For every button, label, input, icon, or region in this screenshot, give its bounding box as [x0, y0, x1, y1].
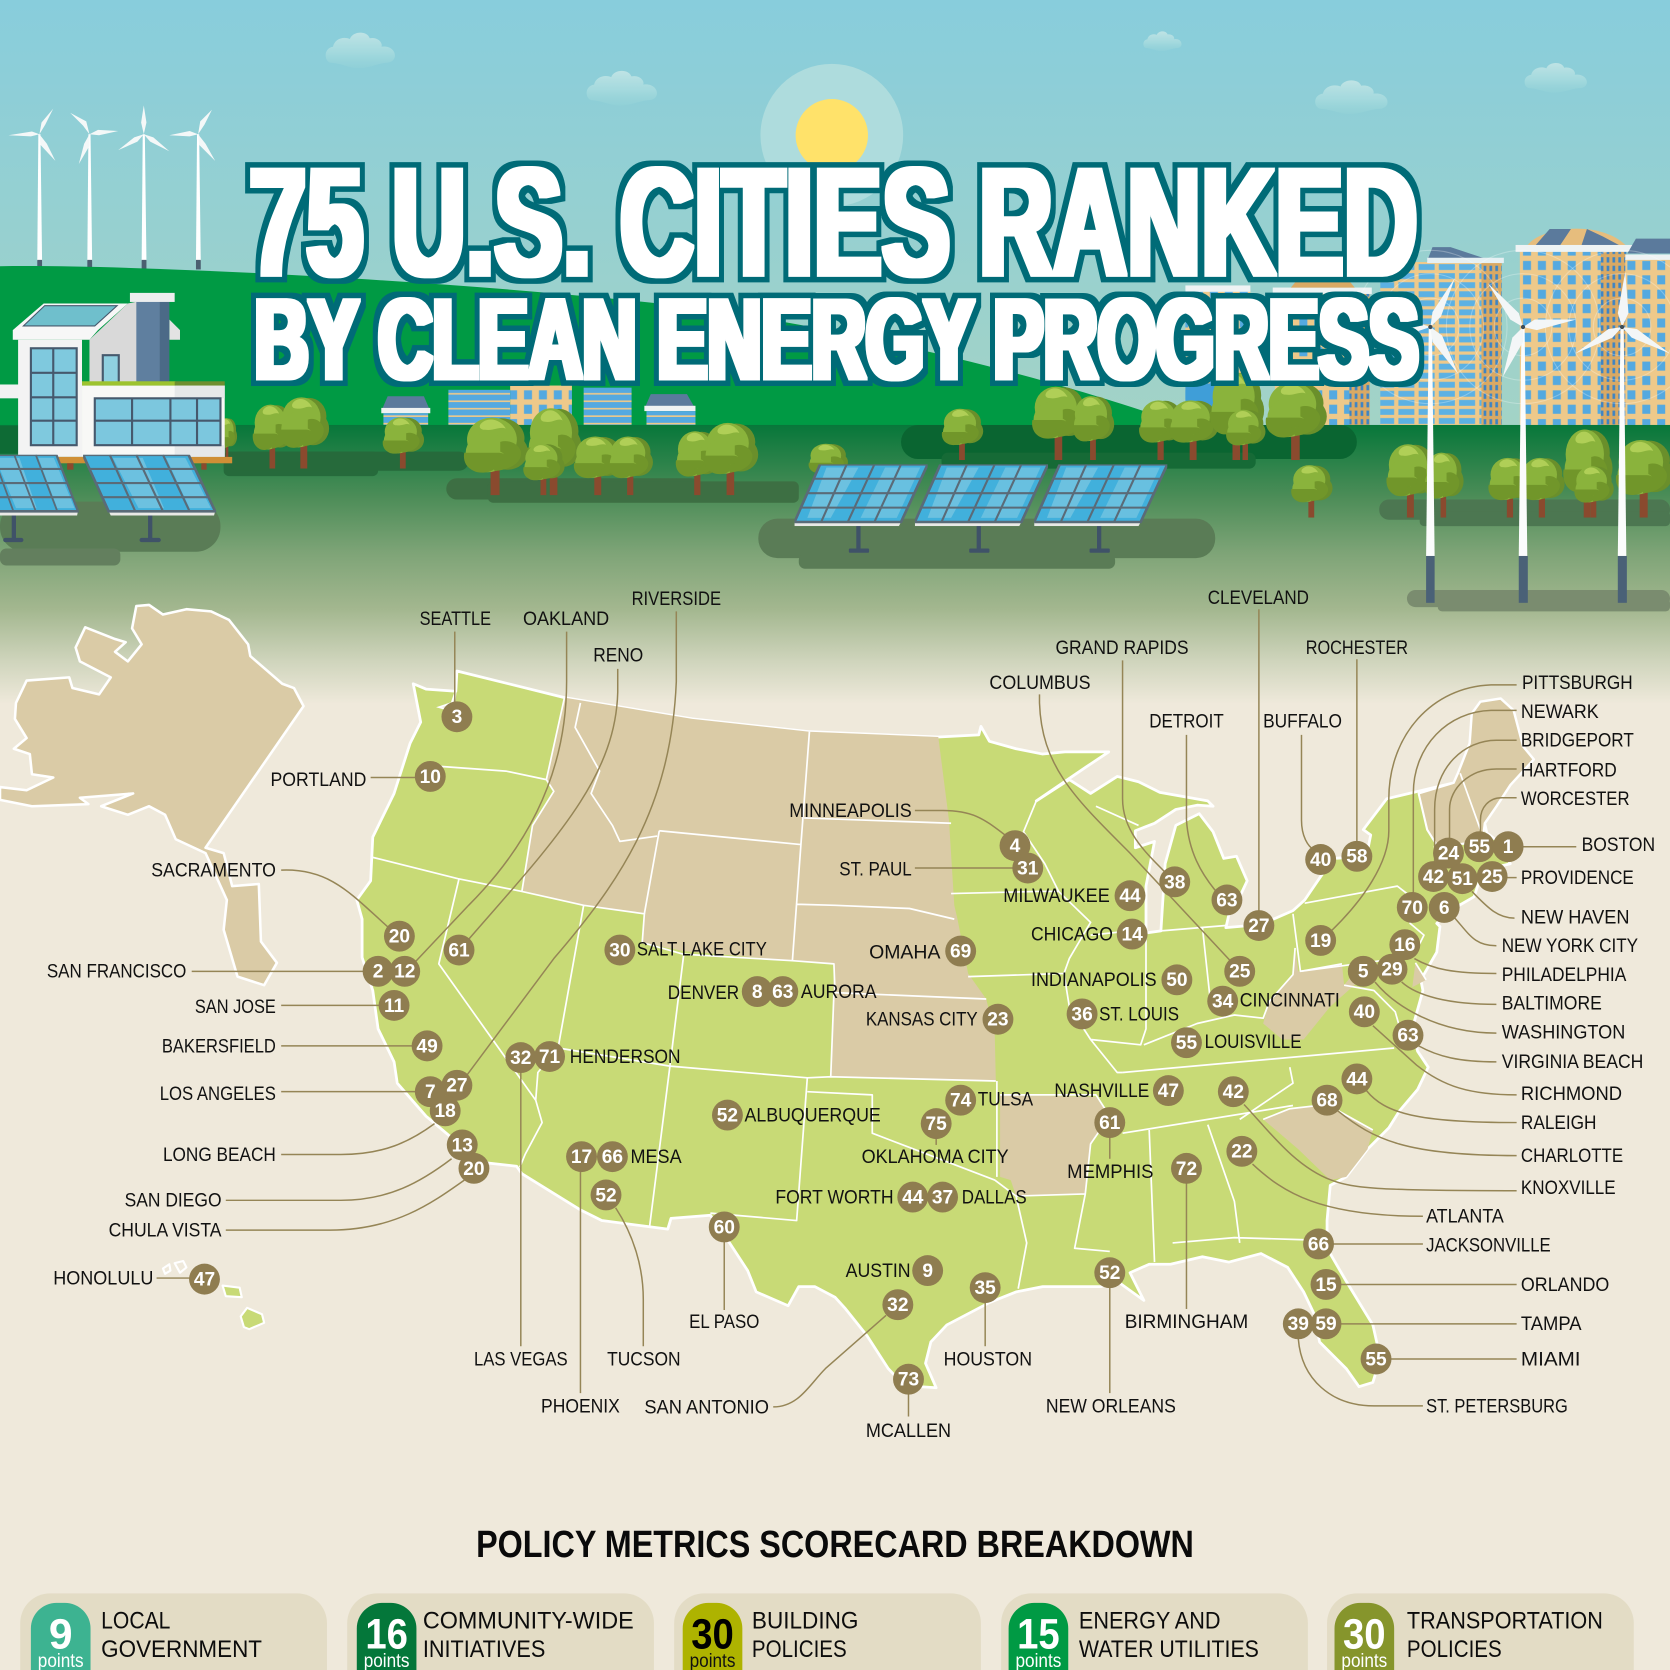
city: San Antonio: SAN ANTONIO [644, 1397, 769, 1418]
city: Reno: 61 [448, 940, 470, 961]
city: Chula Vista [109, 1153, 489, 1242]
city: Knoxville: 42 [1223, 1082, 1244, 1103]
city: Honolulu: HONOLULU [53, 1268, 153, 1289]
city: Omaha: OMAHA [869, 943, 941, 964]
tan state: South Carolina [1263, 1104, 1373, 1180]
city: Hartford [1433, 760, 1617, 869]
card text [1079, 1607, 1259, 1663]
city: Milwaukee: 44 [1119, 886, 1141, 907]
city: Phoenix: 17 [571, 1147, 592, 1168]
card text: GOVERNMENT [101, 1636, 262, 1663]
city: New Orleans: 52 [1099, 1263, 1120, 1284]
map: contiguous states [357, 671, 1534, 1388]
city: San Francisco: 2 [373, 962, 383, 983]
city: Cleveland [1208, 588, 1309, 941]
title [249, 135, 1419, 404]
city: Seattle: SEATTLE [420, 609, 491, 630]
ground shadows [0, 425, 1670, 611]
city: Richmond: 40 [1354, 1002, 1375, 1023]
city: Boston: BOSTON [1582, 835, 1655, 856]
city: Tucson: 52 [595, 1185, 617, 1206]
city: Grand Rapids: 38 [1164, 872, 1186, 893]
card: building policies [674, 1593, 981, 1670]
city: Philadelphia: PHILADELPHIA [1502, 965, 1627, 986]
city: Milwaukee [1003, 880, 1145, 911]
city: Jacksonville: 66 [1308, 1234, 1329, 1255]
badge: 30 points: 30 [691, 1611, 734, 1659]
city: Omaha: 69 [950, 941, 971, 962]
badge: 30 points: 30 [1343, 1611, 1386, 1659]
city: Tulsa [945, 1085, 1033, 1116]
city: Reno [444, 645, 643, 965]
city: Pittsburgh: PITTSBURGH [1522, 673, 1633, 694]
city: Long Beach [163, 1095, 461, 1166]
city: Bakersfield [162, 1030, 443, 1061]
badge: 9 points: 9 [49, 1611, 73, 1659]
city: Memphis: MEMPHIS [1067, 1162, 1153, 1183]
city: Cleveland: CLEVELAND [1208, 588, 1309, 609]
city: Kansas City: KANSAS CITY [866, 1010, 978, 1031]
city: Austin: 9 [922, 1261, 933, 1282]
city: Buffalo: BUFFALO [1263, 711, 1342, 732]
city: St. Paul: ST. PAUL [839, 859, 912, 880]
city: Miami: 55 [1365, 1349, 1387, 1370]
city: Austin: AUSTIN [846, 1261, 911, 1282]
city: Salt Lake City: SALT LAKE CITY [637, 939, 767, 960]
city: Bridgeport: BRIDGEPORT [1521, 731, 1634, 752]
city: Henderson: HENDERSON [570, 1047, 681, 1068]
city: Minneapolis [789, 801, 1030, 861]
city: Washington [1348, 956, 1625, 1043]
card text [101, 1607, 262, 1663]
city: El Paso [689, 1211, 759, 1333]
city: Pittsburgh: 19 [1310, 931, 1331, 952]
city: Bridgeport [1418, 731, 1634, 892]
city: Kansas City [866, 1004, 1013, 1035]
city: New Haven [1447, 863, 1630, 928]
city: St. Louis: ST. LOUIS [1099, 1004, 1179, 1025]
city: Providence: 25 [1481, 867, 1503, 888]
city: Tampa: TAMPA [1521, 1314, 1582, 1335]
city: Fort Worth [775, 1182, 928, 1213]
city: Aurora [767, 976, 877, 1007]
city: New Haven: NEW HAVEN [1521, 907, 1630, 928]
city: Austin [846, 1255, 943, 1286]
city: Miami [1361, 1344, 1581, 1374]
city: Louisville: 55 [1176, 1033, 1197, 1054]
city: Fort Worth: 44 [902, 1188, 924, 1209]
scorecard heading: POLICY METRICS SCORECARD BREAKDOWN [476, 1523, 1194, 1566]
city: Seattle: 3 [452, 707, 462, 728]
city: Portland: 10 [420, 767, 441, 788]
city: Tampa: 59 [1315, 1314, 1337, 1335]
city: Sacramento: SACRAMENTO [151, 861, 276, 882]
city: McAllen [866, 1364, 951, 1442]
city: Denver: DENVER [668, 983, 739, 1004]
city: Henderson: 71 [539, 1047, 561, 1068]
city: Oklahoma City: OKLAHOMA CITY [862, 1147, 1009, 1168]
city: Chicago: 14 [1121, 924, 1143, 945]
city: Mesa: MESA [631, 1147, 682, 1168]
city: New Haven: 51 [1452, 869, 1473, 890]
city: Buffalo [1263, 711, 1342, 875]
city towers [1185, 229, 1670, 425]
tan state: Delaware [1412, 963, 1426, 987]
solar panels: center [795, 464, 1167, 553]
city: Orlando [1311, 1269, 1609, 1300]
map: Hawaii [163, 1261, 264, 1329]
city: Raleigh: RALEIGH [1521, 1113, 1597, 1134]
solar panels: left [0, 455, 215, 542]
state borders [373, 698, 1487, 1289]
card text: BUILDING [752, 1607, 858, 1634]
city: Memphis [1067, 1107, 1153, 1183]
card text: POLICIES [1407, 1636, 1502, 1663]
city: Orlando: 15 [1315, 1275, 1337, 1296]
city: Tampa [1311, 1308, 1582, 1339]
city: Jacksonville: JACKSONVILLE [1426, 1235, 1551, 1256]
city: Chula Vista: CHULA VISTA [109, 1221, 222, 1242]
card text [423, 1607, 634, 1663]
city: Miami: MIAMI [1521, 1349, 1581, 1370]
card: transportation policies [1327, 1593, 1634, 1670]
city: Newark: 70 [1402, 898, 1423, 919]
city: Columbus: COLUMBUS [989, 673, 1091, 694]
city: Sacramento: 20 [389, 927, 410, 948]
city: El Paso: EL PASO [689, 1312, 759, 1333]
small wind turbines on hill [9, 105, 215, 269]
badge: 15 points [1009, 1603, 1068, 1670]
city: Oakland: 12 [394, 962, 415, 983]
map: Alaska [0, 605, 304, 985]
city: Los Angeles: LOS ANGELES [160, 1084, 276, 1105]
city: Virginia Beach [1393, 1020, 1643, 1073]
clouds [326, 31, 1587, 114]
city: San Diego [125, 1129, 478, 1212]
city: Mesa [597, 1141, 682, 1172]
card: local government [20, 1593, 327, 1670]
ground [0, 425, 1670, 704]
city: Denver [668, 976, 773, 1007]
city: Bakersfield: 49 [416, 1036, 438, 1057]
city: San Jose: 11 [384, 996, 405, 1017]
city: Honolulu: 47 [194, 1270, 215, 1291]
city: Newark [1397, 702, 1599, 923]
city: Cincinnati: 34 [1212, 992, 1234, 1013]
tan state: West Virginia [1263, 948, 1358, 1039]
city: St. Paul: 31 [1017, 858, 1039, 879]
city: Atlanta: ATLANTA [1426, 1207, 1504, 1228]
city: Bakersfield: BAKERSFIELD [162, 1036, 276, 1057]
city: St. Louis [1067, 998, 1179, 1029]
city: Tulsa: 74 [950, 1091, 972, 1112]
city: Riverside: 27 [446, 1076, 468, 1097]
city: Washington: 5 [1358, 962, 1369, 983]
city: Denver: 8 [752, 982, 763, 1003]
city: Albuquerque: 52 [717, 1105, 738, 1126]
card text: COMMUNITY-WIDE [423, 1607, 634, 1634]
city: New York City [1429, 892, 1638, 957]
city: Nashville [1054, 1075, 1184, 1106]
city: Orlando: ORLANDO [1521, 1275, 1609, 1296]
city: Columbus [989, 673, 1255, 987]
city: Houston: HOUSTON [944, 1349, 1032, 1370]
card text [1407, 1607, 1603, 1663]
card text: POLICIES [752, 1636, 847, 1663]
city: Indianapolis: 50 [1166, 970, 1188, 991]
city: Albuquerque: ALBUQUERQUE [744, 1105, 881, 1126]
card text: ENERGY AND [1079, 1607, 1221, 1634]
city: St. Petersburg: 39 [1288, 1314, 1309, 1335]
city: Henderson [534, 1041, 681, 1072]
city: San Antonio: 32 [887, 1295, 908, 1316]
city: Aurora: AURORA [801, 982, 877, 1003]
city: Washington: WASHINGTON [1502, 1022, 1625, 1043]
city: Richmond: RICHMOND [1521, 1084, 1622, 1105]
sky [0, 0, 1670, 426]
city: Detroit: DETROIT [1149, 711, 1224, 732]
city: San Francisco [47, 956, 394, 987]
city: San Francisco: SAN FRANCISCO [47, 962, 186, 983]
city: Houston: 35 [975, 1278, 996, 1299]
city: St. Louis: 36 [1071, 1004, 1093, 1025]
city: Portland: PORTLAND [271, 770, 366, 791]
city: Detroit [1149, 711, 1242, 915]
city: Virginia Beach: 63 [1397, 1026, 1419, 1047]
city: Columbus: 25 [1229, 962, 1251, 983]
tan states: northern New England [1419, 699, 1534, 847]
city: Sacramento [151, 861, 415, 952]
city: Providence: PROVIDENCE [1521, 868, 1634, 889]
city: Honolulu [53, 1264, 220, 1295]
badge: 9 points [31, 1603, 91, 1670]
city: New York City: 6 [1439, 898, 1450, 919]
card text: TRANSPORTATION [1407, 1607, 1603, 1634]
city: Richmond [1349, 996, 1622, 1105]
city: Long Beach: 18 [435, 1101, 456, 1122]
city: Rochester: ROCHESTER [1306, 638, 1408, 659]
city: Baltimore: 29 [1381, 960, 1403, 981]
background small buildings [381, 386, 695, 425]
city: Dallas: DALLAS [962, 1188, 1027, 1209]
tan state: Arkansas [1000, 1095, 1110, 1196]
city: Rochester: 58 [1346, 847, 1368, 868]
city: Rochester [1306, 638, 1408, 872]
city: Chicago: CHICAGO [1031, 924, 1113, 945]
badge: 15 points: 15 [1017, 1611, 1060, 1659]
city: Omaha [869, 936, 976, 967]
city: Newark: NEWARK [1521, 702, 1599, 723]
city: Phoenix [541, 1141, 620, 1417]
city: Charlotte: CHARLOTTE [1521, 1146, 1623, 1167]
city: Minneapolis: 4 [1010, 836, 1021, 857]
city: Tulsa: TULSA [978, 1090, 1033, 1111]
city: McAllen: MCALLEN [866, 1421, 951, 1442]
city: Buffalo: 40 [1310, 850, 1331, 871]
city: Minneapolis: MINNEAPOLIS [789, 801, 912, 822]
city: Baltimore: BALTIMORE [1502, 994, 1602, 1015]
city: Las Vegas: 32 [510, 1048, 531, 1069]
city: McAllen: 73 [898, 1370, 919, 1391]
city: Portland [271, 761, 446, 792]
card: energy and water utilities [1001, 1593, 1308, 1670]
city: Birmingham [1125, 1153, 1248, 1333]
city: Salt Lake City: 30 [609, 940, 631, 961]
city: Fort Worth: FORT WORTH [775, 1188, 894, 1209]
city: Aurora: 63 [772, 982, 793, 1003]
city: Oklahoma City: 75 [926, 1114, 947, 1135]
city: Atlanta: 22 [1231, 1142, 1253, 1163]
city: Louisville: LOUISVILLE [1205, 1032, 1301, 1053]
hill [0, 266, 1182, 426]
city: Worcester: 55 [1469, 837, 1490, 858]
badge: 16 points: 16 [365, 1611, 408, 1659]
city: Philadelphia [1389, 929, 1627, 986]
city: Indianapolis [1031, 964, 1192, 995]
city: Raleigh [1341, 1063, 1597, 1134]
city: St. Paul [839, 853, 1043, 883]
city: Mesa: 66 [602, 1147, 623, 1168]
city: Riverside [441, 589, 721, 1101]
city: Las Vegas: LAS VEGAS [474, 1349, 568, 1370]
sun [760, 64, 903, 207]
city: Louisville [1171, 1027, 1301, 1058]
city: Memphis: 61 [1099, 1113, 1121, 1134]
city: Pittsburgh [1305, 673, 1633, 956]
card text: INITIATIVES [423, 1636, 545, 1663]
city: Los Angeles: 7 [425, 1082, 436, 1103]
trees [217, 372, 1670, 518]
city: Nashville: 47 [1158, 1081, 1179, 1102]
city: New York City: NEW YORK CITY [1502, 936, 1638, 957]
badge: 16 points [357, 1603, 416, 1670]
city: Hartford: HARTFORD [1521, 760, 1617, 781]
city: Philadelphia: 16 [1394, 935, 1415, 956]
house [0, 293, 232, 470]
card text: WATER UTILITIES [1079, 1636, 1259, 1663]
city: Houston [944, 1272, 1032, 1370]
city: San Diego: SAN DIEGO [125, 1191, 222, 1212]
city: Worcester [1464, 789, 1630, 862]
city: Los Angeles [160, 1076, 446, 1107]
city: San Jose [195, 990, 410, 1021]
card text: LOCAL [101, 1607, 170, 1634]
city: Chula Vista: 20 [463, 1159, 485, 1180]
card text [752, 1607, 858, 1663]
city: El Paso: 60 [714, 1217, 735, 1238]
city: Dallas [927, 1182, 1027, 1213]
city: Hartford: 24 [1438, 843, 1459, 864]
city: Phoenix: PHOENIX [541, 1396, 620, 1417]
card: community-wide initiatives [347, 1593, 654, 1670]
badge: 30 points [1335, 1603, 1394, 1670]
city: Boston [1493, 831, 1655, 862]
city: Grand Rapids [1055, 638, 1190, 897]
city: Providence [1477, 861, 1634, 892]
city: Salt Lake City [604, 935, 767, 965]
city: San Jose: SAN JOSE [195, 997, 276, 1018]
large wind turbines [1354, 250, 1670, 603]
city: Oklahoma City [862, 1108, 1009, 1168]
city: Detroit: 63 [1216, 890, 1238, 911]
Puget Sound notch [439, 690, 456, 711]
city: San Diego: 13 [452, 1135, 473, 1156]
city: Virginia Beach: VIRGINIA BEACH [1502, 1052, 1643, 1073]
city: Raleigh: 44 [1346, 1069, 1368, 1090]
city: Jacksonville [1303, 1229, 1551, 1259]
tan states: northern plains and Rockies [522, 698, 996, 1081]
city: Nashville: NASHVILLE [1054, 1081, 1149, 1102]
city: New Orleans: NEW ORLEANS [1046, 1396, 1176, 1417]
city: Tucson [591, 1180, 681, 1370]
city: Cleveland: 27 [1248, 916, 1270, 937]
city: Cincinnati: CINCINNATI [1240, 990, 1340, 1011]
city: Boston: 1 [1503, 837, 1514, 858]
city: Grand Rapids: GRAND RAPIDS [1055, 638, 1189, 659]
city: Long Beach: LONG BEACH [163, 1145, 276, 1166]
city: Charlotte: 68 [1316, 1091, 1338, 1112]
city: New Orleans [1046, 1257, 1176, 1417]
city: Atlanta [1226, 1136, 1504, 1228]
badge: 30 points [683, 1603, 742, 1670]
city: Chicago [1031, 919, 1148, 949]
city: Reno: RENO [593, 645, 643, 666]
city: Bridgeport: 42 [1423, 867, 1444, 888]
city: Riverside: RIVERSIDE [632, 589, 721, 610]
city: St. Petersburg [1283, 1308, 1568, 1417]
city: Knoxville: KNOXVILLE [1521, 1178, 1616, 1199]
city: Worcester: WORCESTER [1521, 789, 1630, 810]
city: St. Petersburg: ST. PETERSBURG [1426, 1396, 1568, 1417]
city: Tucson: TUCSON [607, 1349, 681, 1370]
city: Charlotte [1312, 1085, 1623, 1167]
city: Kansas City: 23 [987, 1010, 1009, 1031]
city: Indianapolis: INDIANAPOLIS [1031, 970, 1157, 991]
city: Cincinnati [1207, 986, 1340, 1017]
city: San Antonio [644, 1289, 913, 1418]
city: Dallas: 37 [932, 1188, 953, 1209]
city: Baltimore [1377, 954, 1602, 1015]
city: Birmingham: 72 [1176, 1159, 1197, 1180]
city: Albuquerque [712, 1100, 881, 1131]
city: Seattle [420, 609, 491, 732]
city: Birmingham: BIRMINGHAM [1125, 1312, 1248, 1333]
city: Oakland: OAKLAND [523, 609, 609, 630]
city: Knoxville [1218, 1076, 1616, 1199]
city: Oakland [389, 609, 609, 987]
city: Las Vegas [474, 1042, 568, 1370]
city: Milwaukee: MILWAUKEE [1003, 886, 1110, 907]
